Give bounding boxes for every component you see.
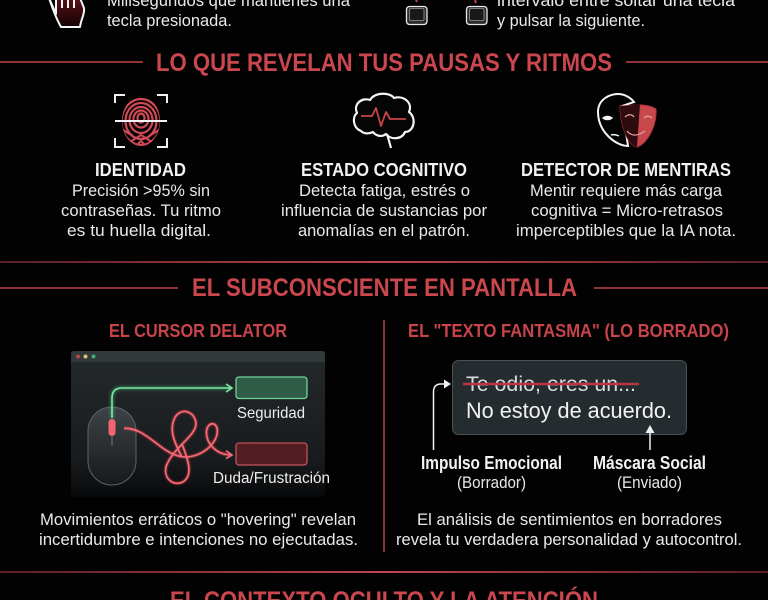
- text: estado cognitivo body: influencia de sustancias por: [281, 201, 487, 220]
- heading: cursor delator: EL CURSOR DELATOR: [109, 321, 287, 341]
- text: identidad body: [61, 181, 221, 240]
- illustration: browser window: [71, 351, 330, 497]
- box: duda: [236, 443, 307, 465]
- text: estado cognitivo body: [281, 181, 487, 240]
- label: mascara social: [593, 453, 706, 492]
- text: detector body: cognitiva = Micro-retrasos: [531, 201, 723, 220]
- illustration: message box: No estoy de acuerdo.: [466, 398, 672, 423]
- text: estado cognitivo title: ESTADO COGNITIVO: [301, 160, 467, 180]
- box: seguridad: [236, 377, 307, 398]
- text: cursor description: [39, 510, 358, 549]
- icon: mouse: [88, 407, 136, 485]
- icon: theatre masks: [598, 94, 656, 147]
- text: fantasma description: El análisis de sentimientos en borradores: [417, 510, 722, 529]
- icon: two keys: [406, 0, 487, 24]
- text: identidad title: IDENTIDAD: [95, 160, 186, 180]
- label: mascara social: Máscara Social: [593, 453, 706, 473]
- text: flight description: [497, 0, 736, 30]
- icon: brain with pulse: [354, 94, 414, 148]
- panel: flight time: [406, 0, 736, 30]
- label: duda: Duda/Frustración: [213, 470, 330, 487]
- label: seguridad: Seguridad: [237, 405, 305, 422]
- arrow: to draft: [434, 380, 451, 450]
- text: detector body: Mentir requiere más carga: [530, 181, 723, 200]
- text: identidad body: es tu huella digital.: [67, 221, 211, 240]
- text: dwell description: tecla presionada.: [107, 11, 232, 30]
- panel: estado cognitivo: [281, 94, 487, 240]
- text: flight description: y pulsar la siguiente.: [497, 11, 645, 30]
- text: cursor description: Movimientos erráticos o "hovering" revelan: [40, 510, 356, 529]
- arrow: to sent: [646, 425, 654, 450]
- text: dwell description: [107, 0, 351, 30]
- panel: texto fantasma: [396, 321, 742, 549]
- text: fantasma description: [396, 510, 742, 549]
- heading: pausas y ritmos: LO QUE REVELAN TUS PAUSAS Y RITMOS: [156, 49, 612, 77]
- label: impulso emocional: Impulso Emocional: [421, 453, 562, 473]
- label: impulso emocional: (Borrador): [457, 473, 526, 492]
- text: estado cognitivo body: anomalías en el patrón.: [298, 221, 470, 240]
- text: detector title: DETECTOR DE MENTIRAS: [521, 160, 731, 180]
- text: detector body: [516, 181, 736, 240]
- text: cursor description: incertidumbre e intenciones no ejecutadas.: [39, 530, 358, 549]
- text: identidad body: contraseñas. Tu ritmo: [61, 201, 221, 220]
- panel: dwell time: [49, 0, 351, 30]
- arrow: confident green path: [112, 384, 232, 418]
- illustration: message box: Te odio, eres un...: [466, 373, 636, 396]
- panel: identidad: [61, 95, 221, 240]
- illustration: message box: [452, 360, 686, 434]
- text: detector body: imperceptibles que la IA nota.: [516, 221, 736, 240]
- text: fantasma description: revela tu verdadera personalidad y autocontrol.: [396, 530, 742, 549]
- icon: fingerprint: [115, 95, 167, 147]
- heading: subconsciente: EL SUBCONSCIENTE EN PANTALLA: [192, 274, 577, 302]
- heading: texto fantasma: EL "TEXTO FANTASMA" (LO BORRADO): [408, 321, 729, 341]
- arrow: erratic red path: [124, 411, 232, 483]
- label: impulso emocional: [421, 453, 562, 492]
- panel: cursor delator: [39, 321, 358, 549]
- icon: hand pressing: [49, 0, 84, 27]
- label: mascara social: (Enviado): [617, 473, 682, 492]
- text: estado cognitivo body: Detecta fatiga, estrés o: [299, 181, 470, 200]
- text: identidad body: Precisión >95% sin: [72, 181, 210, 200]
- panel: detector de mentiras: [516, 94, 736, 240]
